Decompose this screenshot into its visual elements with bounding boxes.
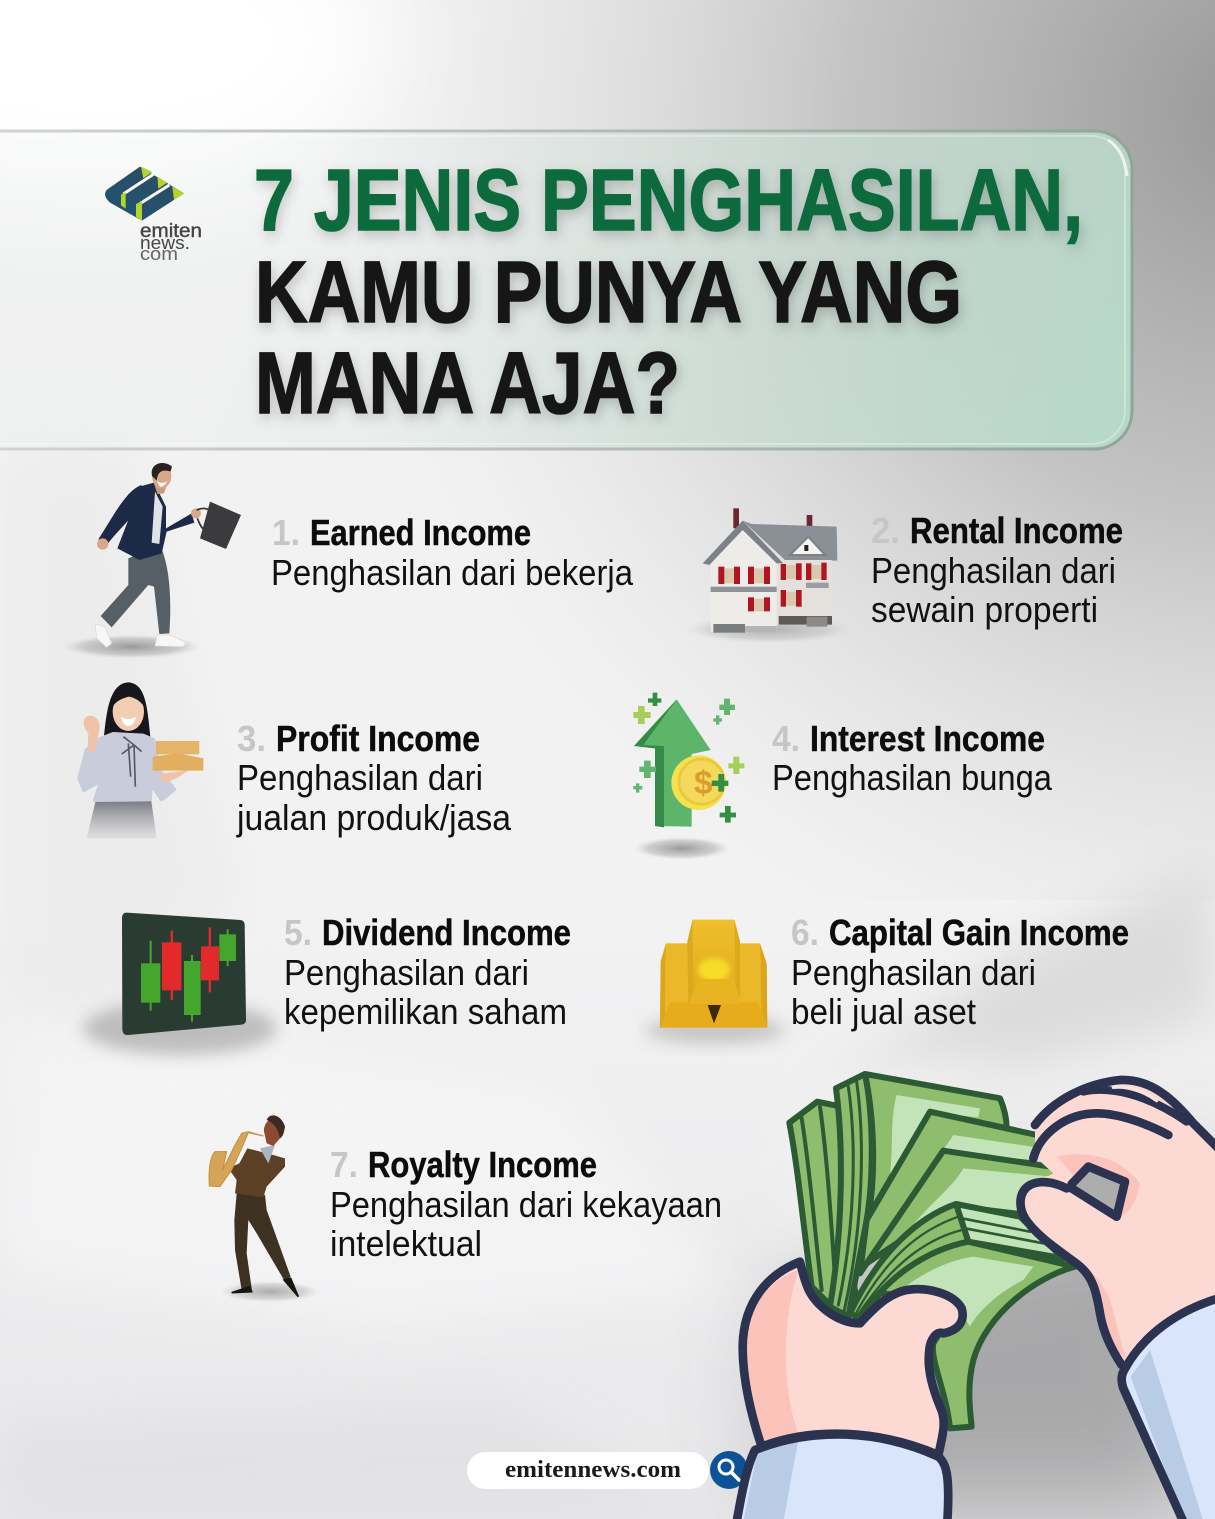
text: Capital Gain Income: 6.	[791, 912, 819, 953]
text: Dividend Income	[284, 912, 571, 1032]
item 5: Dividend Income	[83, 912, 571, 1055]
text: Capital Gain Income: beli jual aset	[791, 991, 976, 1032]
icon: woman holding boxes	[79, 682, 203, 838]
text: Interest Income: 4.	[772, 718, 800, 759]
icon: walking businessman	[62, 463, 241, 659]
text: Capital Gain Income: Penghasilan dari	[791, 952, 1036, 993]
text: Royalty Income: Royalty Income	[368, 1144, 597, 1185]
text: Profit Income: Profit Income	[276, 718, 480, 759]
text: Profit Income: jualan produk/jasa	[236, 797, 512, 838]
text: Interest Income	[772, 718, 1053, 798]
logo wordmark: com	[140, 244, 178, 264]
title	[254, 152, 1083, 432]
text: Earned Income: Earned Income	[310, 512, 531, 553]
text: Royalty Income: 7.	[330, 1144, 358, 1185]
text: Earned Income: Penghasilan dari bekerja	[271, 552, 634, 593]
text: Rental Income: 2.	[871, 510, 900, 551]
text: Rental Income: Rental Income	[910, 510, 1123, 551]
left hand	[743, 1262, 963, 1455]
icon: green arrow with coin: $	[694, 765, 713, 802]
text: Capital Gain Income	[791, 912, 1129, 1032]
icon: magnifier	[710, 1451, 748, 1489]
text: Earned Income: 1.	[272, 512, 300, 553]
logo wordmark	[140, 221, 202, 264]
item 1: Earned Income	[62, 463, 634, 659]
search bar: emitennews.com	[467, 1451, 748, 1489]
text: Dividend Income: 5.	[284, 912, 312, 953]
item 3: Profit Income	[79, 682, 512, 838]
search bar: emitennews.com: emitennews.com	[505, 1457, 681, 1483]
item 6: Capital Gain Income	[645, 912, 1129, 1043]
logo wordmark: emiten	[140, 221, 202, 242]
logo mark	[105, 167, 184, 221]
icon: saxophone player	[209, 1115, 320, 1302]
text: Royalty Income: Penghasilan dari kekayaan	[330, 1184, 722, 1225]
text: Profit Income: Penghasilan dari	[237, 757, 483, 798]
text: Royalty Income: intelektual	[330, 1223, 482, 1264]
right sleeve	[1122, 1298, 1215, 1519]
banknotes	[789, 1074, 1075, 1428]
item 4: Interest Income	[633, 693, 1053, 860]
logo wordmark: news.	[140, 233, 190, 253]
text: Dividend Income: kepemilikan saham	[284, 991, 567, 1032]
text: Rental Income: Penghasilan dari	[871, 550, 1116, 591]
item 7: Royalty Income	[209, 1115, 722, 1302]
text: Interest Income: Interest Income	[810, 718, 1045, 759]
left sleeve	[737, 1434, 948, 1519]
item 2: Rental Income	[685, 508, 1123, 643]
icon: green arrow with coin	[633, 693, 744, 860]
title: KAMU PUNYA YANG	[255, 244, 962, 341]
text: Rental Income	[871, 510, 1123, 630]
right hand	[1020, 1080, 1215, 1365]
illustration: hands counting money	[737, 1074, 1215, 1519]
icon: gold bars	[645, 920, 785, 1043]
text: Royalty Income	[330, 1144, 722, 1264]
logo: emitennews.com	[105, 167, 202, 264]
text: Dividend Income: Penghasilan dari	[284, 952, 529, 993]
text: Rental Income: sewain properti	[871, 589, 1098, 630]
title: MANA AJA?	[255, 335, 680, 432]
text: Profit Income: 3.	[237, 718, 266, 759]
icon: house	[685, 508, 852, 643]
text: Earned Income	[271, 512, 634, 593]
text: Profit Income	[236, 718, 512, 838]
text: Dividend Income: Dividend Income	[322, 912, 571, 953]
icon: candlestick chart board	[83, 913, 277, 1055]
text: Capital Gain Income: Capital Gain Income	[829, 912, 1129, 953]
text: Interest Income: Penghasilan bunga	[772, 757, 1053, 798]
title panel	[0, 131, 1132, 449]
